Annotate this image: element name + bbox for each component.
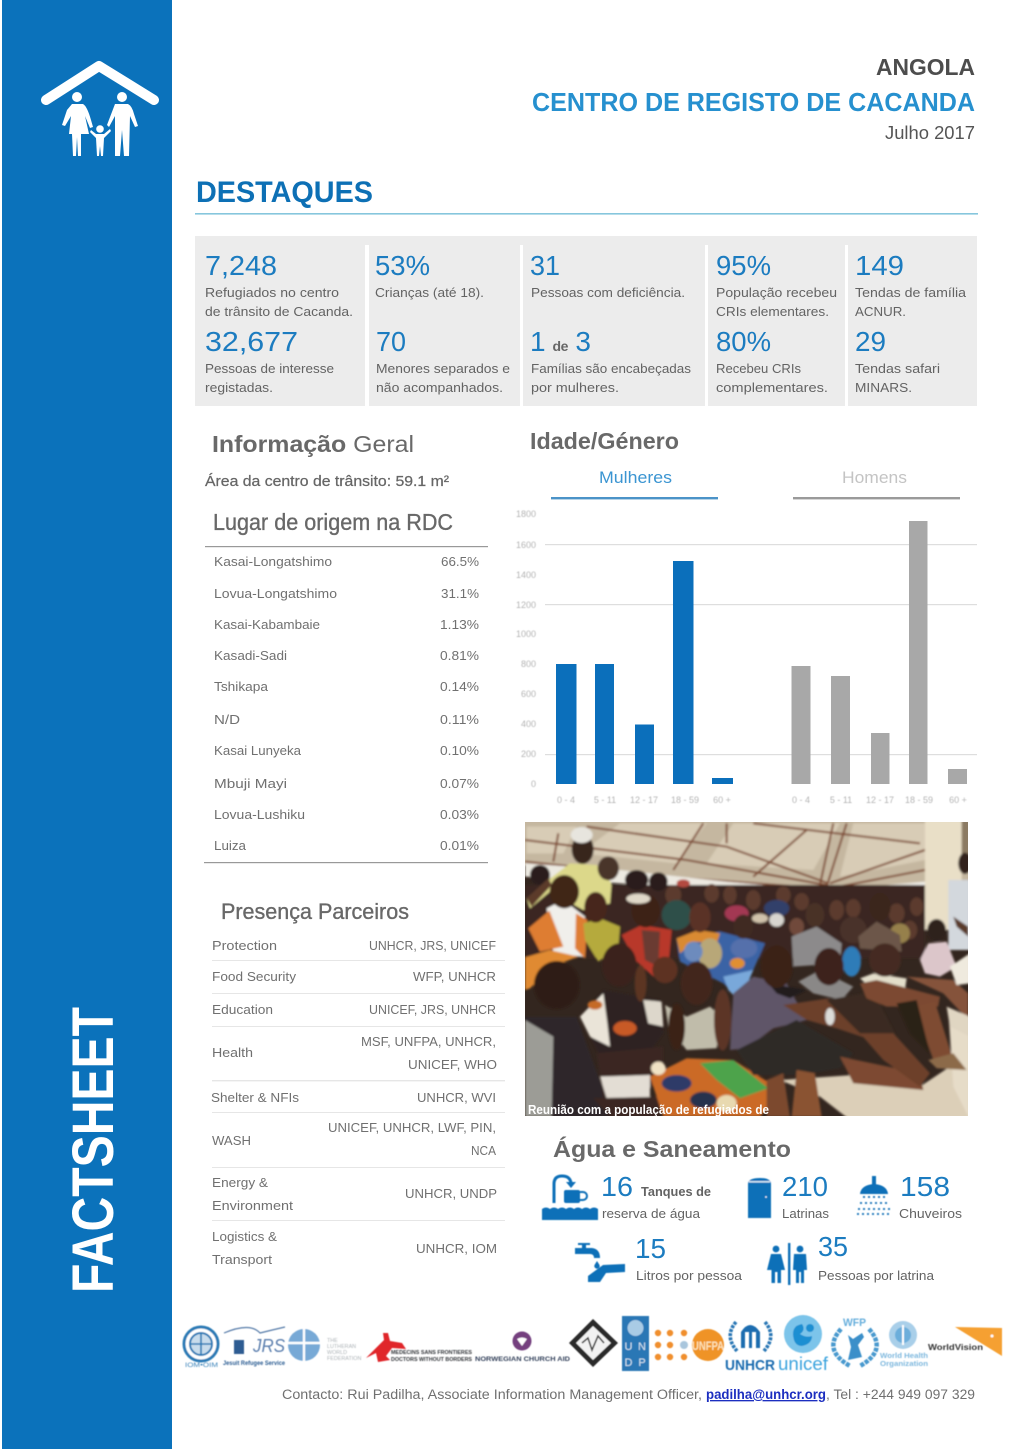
logo: MSF: DOCTORS WITHOUT BORDERS xyxy=(391,1357,472,1363)
figure: family tents: Tendas de família xyxy=(855,285,967,300)
heading: idade/genero: Idade/Género xyxy=(530,428,679,454)
figure: separated minors xyxy=(376,326,510,395)
photo caption: Reunião com a população de refugiados de xyxy=(528,1102,769,1117)
table: place of origin: Kasai-Kabambaie xyxy=(214,617,320,632)
table: place of origin: 0.03% xyxy=(440,807,479,822)
country: ANGOLA xyxy=(876,54,975,80)
crowd background xyxy=(525,885,925,958)
heading: presenca parceiros: Presença Parceiros xyxy=(221,899,409,924)
contact line xyxy=(282,1387,975,1402)
logo: JRS: JRS xyxy=(252,1336,285,1356)
table: partner presence: Education xyxy=(212,1002,273,1017)
table: partner presence: UNICEF, WHO xyxy=(408,1057,497,1072)
stat: tanks xyxy=(601,1171,711,1221)
figure: basic CRIs: 95% xyxy=(716,250,771,281)
women bars xyxy=(556,561,733,784)
logo: WFP: WFP xyxy=(843,1317,866,1329)
table: place of origin: 0.14% xyxy=(440,679,479,694)
figure: persons of interest xyxy=(205,326,334,395)
figure: basic CRIs: CRIs elementares. xyxy=(716,304,829,319)
table: place of origin: N/D xyxy=(214,712,240,727)
icon: people per latrine xyxy=(767,1243,807,1285)
y axis labels xyxy=(516,509,536,789)
table: place of origin: 0.07% xyxy=(440,776,479,791)
men bars xyxy=(792,521,967,784)
figure: female-headed households: por mulheres. xyxy=(531,380,619,395)
icon: family under roof xyxy=(46,66,154,156)
logo: World Vision xyxy=(928,1327,1002,1356)
text: area: Área da centro de trânsito: 59.1 m² xyxy=(205,473,449,490)
table: partner presence: Food Security xyxy=(212,969,297,984)
x axis labels: 18 - 59 xyxy=(905,795,933,805)
right seated man xyxy=(798,970,853,1000)
table: partner presence: UNHCR, WVI xyxy=(417,1090,496,1105)
far right man xyxy=(860,973,907,992)
table: partner presence: UNICEF, JRS, UNHCR xyxy=(369,1002,496,1017)
y axis labels: 1200 xyxy=(516,600,536,610)
table: partner presence: WASH xyxy=(212,1133,251,1148)
table: partner presence: UNHCR, UNDP xyxy=(405,1186,497,1201)
child in yellow xyxy=(583,918,620,962)
table: partner presence: Health xyxy=(212,1045,253,1060)
table: place of origin: 0.11% xyxy=(440,712,479,727)
y axis labels: 600 xyxy=(521,689,536,699)
icon: latrine xyxy=(748,1178,771,1218)
x axis labels: 0 - 4 xyxy=(792,795,810,805)
x axis labels: 18 - 59 xyxy=(671,795,699,805)
smiling woman xyxy=(665,1005,722,1050)
y axis labels: 800 xyxy=(521,659,536,669)
table: partner presence: Transport xyxy=(212,1252,272,1267)
stat: people per latrine: 35 xyxy=(818,1231,848,1262)
seated man pink shirt xyxy=(920,942,957,977)
figure: complementary CRIs xyxy=(716,326,828,395)
table: partner presence: NCA xyxy=(471,1143,496,1158)
pillar xyxy=(925,820,962,930)
stat: showers: Chuveiros xyxy=(899,1206,963,1221)
legend: women: Mulheres xyxy=(599,468,672,487)
photo: meeting with refugees xyxy=(520,820,972,1120)
figure: children: Crianças (até 18). xyxy=(375,285,484,300)
second woman xyxy=(584,992,664,1052)
standing woman xyxy=(527,863,612,910)
y axis labels: 400 xyxy=(521,719,536,729)
figure: family tents: 149 xyxy=(855,250,904,281)
logo: UNFPA xyxy=(655,1329,724,1361)
logo: MSF: MEDECINS SANS FRONTIERES xyxy=(391,1350,472,1356)
logo: UNHCR: UNHCR xyxy=(725,1357,775,1374)
figure: disability: 31 xyxy=(530,250,560,281)
figure: refugees: Refugiados no centro xyxy=(205,285,339,300)
logo: WHO: World Health xyxy=(880,1353,928,1360)
logo: World Vision: WorldVision xyxy=(928,1343,983,1352)
skirt xyxy=(650,1058,783,1117)
figure: complementary CRIs: 80% xyxy=(716,326,771,357)
logo: MSF xyxy=(366,1333,472,1363)
standing man right xyxy=(948,880,970,950)
figure: safari tents: 29 xyxy=(855,326,886,357)
figure: refugees: de trânsito de Cacanda. xyxy=(205,304,353,319)
figure: separated minors: Menores separados e xyxy=(376,361,510,376)
table: partner presence: UNHCR, JRS, UNICEF xyxy=(369,938,496,953)
stat: showers xyxy=(899,1171,963,1221)
figure: persons of interest: 32,677 xyxy=(205,326,298,357)
contact line: Contacto: Rui Padilha, Associate Information Management Officer, xyxy=(282,1387,702,1402)
logo: WHO: Organization xyxy=(880,1361,928,1368)
table: partner presence: UNICEF, UNHCR, LWF, PIN, xyxy=(328,1120,496,1135)
logo: WHO xyxy=(880,1321,928,1368)
figure: basic CRIs: População recebeu xyxy=(716,285,837,300)
logo: UNICEF: unicef xyxy=(778,1354,829,1374)
logo: Norwegian Church Aid xyxy=(475,1332,571,1363)
orange scarf woman xyxy=(525,950,578,990)
x axis labels xyxy=(557,795,967,805)
y axis labels: 1400 xyxy=(516,570,536,580)
blue dress women xyxy=(676,930,766,988)
table: place of origin: Kasadi-Sadi xyxy=(214,648,287,663)
logo: UNDP: N xyxy=(638,1341,646,1353)
table: place of origin: 0.81% xyxy=(440,648,479,663)
table: partner presence: Environment xyxy=(212,1198,293,1213)
table: place of origin: 1.13% xyxy=(440,617,479,632)
stat: people per latrine: Pessoas por latrina xyxy=(818,1268,935,1283)
table: place of origin: Tshikapa xyxy=(214,679,269,694)
stat: litres: 15 xyxy=(635,1233,666,1264)
logo: UNHCR xyxy=(725,1322,775,1374)
back men xyxy=(792,927,842,967)
logo: UNDP: U xyxy=(625,1341,633,1353)
table: partner presence: Protection xyxy=(212,938,277,953)
figure: disability: Pessoas com deficiência. xyxy=(531,285,685,300)
table: place of origin: Lovua-Lushiku xyxy=(214,807,305,822)
logo: Norwegian Church Aid: NORWEGIAN CHURCH AID xyxy=(475,1357,571,1363)
stat: showers: 158 xyxy=(900,1171,950,1202)
stat: litres: Litros por pessoa xyxy=(636,1268,743,1283)
stat: tanks: reserva de água xyxy=(602,1206,701,1221)
table: place of origin: Kasai-Longatshimo xyxy=(214,554,332,569)
figure: children: 53% xyxy=(375,250,430,281)
figure: refugees: 7,248 xyxy=(205,250,277,281)
stat: tanks: Tanques de xyxy=(641,1184,711,1199)
heading: destaques: DESTAQUES xyxy=(196,176,373,209)
partner logos xyxy=(184,1315,1002,1374)
logo: UNICEF xyxy=(778,1315,829,1374)
x axis labels: 5 - 11 xyxy=(594,795,616,805)
table: partner presence: Shelter & NFIs xyxy=(211,1090,300,1105)
table: place of origin: 0.10% xyxy=(440,743,479,758)
figure: complementary CRIs: Recebeu CRIs xyxy=(716,361,801,376)
figure: safari tents: Tendas safari xyxy=(855,361,940,376)
logo: Lutheran World Federation xyxy=(287,1328,361,1362)
table: partner presence: WFP, UNHCR xyxy=(413,969,496,984)
figure: safari tents: MINARS. xyxy=(855,380,912,395)
figure: female-headed households: Famílias são encabeçadas xyxy=(531,361,692,376)
figure: family tents: ACNUR. xyxy=(855,304,906,319)
logo: Lutheran World Federation: WORLD xyxy=(327,1350,347,1356)
table: partner presence xyxy=(211,899,505,1267)
stat: latrines: Latrinas xyxy=(782,1206,830,1221)
email link: padilha@unhcr.org xyxy=(706,1387,826,1402)
logo: UNDP xyxy=(622,1316,649,1371)
icon: water tank xyxy=(542,1176,598,1220)
sidebar label: FACTSHEET: FACTSHEET xyxy=(61,1007,126,1293)
x axis labels: 12 - 17 xyxy=(630,795,658,805)
bar chart: age and gender xyxy=(516,428,977,805)
figure: persons of interest: registadas. xyxy=(205,380,273,395)
x axis labels: 5 - 11 xyxy=(830,795,852,805)
icon: shower xyxy=(857,1176,891,1214)
x axis labels: 0 - 4 xyxy=(557,795,575,805)
table: partner presence: MSF, UNFPA, UNHCR, xyxy=(361,1034,496,1049)
section: water and sanitation xyxy=(542,1135,963,1285)
figure: female-headed households: 1 de 3 xyxy=(530,326,591,357)
centre name: CENTRO DE REGISTO DE CACANDA xyxy=(532,87,975,117)
logo: Lutheran World Federation: FEDERATION xyxy=(327,1356,361,1362)
logo: UNFPA: UNFPA xyxy=(692,1339,724,1353)
red jacket woman xyxy=(622,925,672,977)
stat: latrines: 210 xyxy=(782,1171,828,1202)
sidebar xyxy=(2,0,172,1449)
table: place of origin: 66.5% xyxy=(441,554,479,569)
table: place of origin: Luiza xyxy=(214,838,247,853)
figure: complementary CRIs: complementares. xyxy=(716,380,828,395)
floor xyxy=(782,1067,968,1116)
y axis labels: 0 xyxy=(531,779,536,789)
heading: lugar de origem: Lugar de origem na RDC xyxy=(213,509,453,535)
x axis labels: 12 - 17 xyxy=(866,795,894,805)
table: place of origin: Kasai Lunyeka xyxy=(214,743,302,758)
y axis labels: 1800 xyxy=(516,509,536,519)
figure: children xyxy=(375,250,484,300)
table: partner presence: UNHCR, IOM xyxy=(416,1241,497,1256)
logo: UNDP: D xyxy=(625,1357,633,1369)
figure: safari tents xyxy=(855,326,940,395)
date: Julho 2017 xyxy=(885,123,975,143)
y axis labels: 1000 xyxy=(516,629,536,639)
table: place of origin: 31.1% xyxy=(441,586,479,601)
figure: separated minors: não acompanhados. xyxy=(376,380,503,395)
stat: latrines xyxy=(782,1171,830,1221)
centre man xyxy=(730,977,807,1050)
logo: JRS xyxy=(223,1327,286,1367)
figure: persons of interest: Pessoas de interesse xyxy=(205,361,334,376)
logo: WFP xyxy=(833,1317,877,1366)
figure: disability xyxy=(530,250,685,300)
logo: Lutheran World Federation: THE xyxy=(327,1338,338,1344)
heading: informacao geral: Informação Geral xyxy=(212,431,414,457)
logo: Lutheran World Federation: LUTHERAN xyxy=(327,1344,356,1350)
stat: litres xyxy=(635,1233,743,1283)
x axis labels: 60 + xyxy=(713,795,731,805)
panel: key figures xyxy=(195,236,977,406)
stat: people per latrine xyxy=(818,1231,935,1283)
table: partner presence: Logistics & xyxy=(212,1229,277,1244)
table: place of origin: Mbuji Mayi xyxy=(214,776,287,791)
legend: men: Homens xyxy=(842,468,907,487)
table: place of origin: Lovua-Longatshimo xyxy=(214,586,337,601)
logo: IOM: IOM•OIM xyxy=(185,1362,218,1369)
contact line: , Tel : +244 949 097 329 xyxy=(826,1387,975,1402)
y axis labels: 200 xyxy=(521,749,536,759)
x axis labels: 60 + xyxy=(949,795,967,805)
figure: family tents xyxy=(855,250,967,319)
table: place of origin xyxy=(204,509,488,863)
stat: tanks: 16 xyxy=(601,1171,633,1202)
logo: UNDP: P xyxy=(638,1357,646,1369)
sky strip xyxy=(525,862,926,888)
roof xyxy=(525,822,968,887)
y axis labels: 1600 xyxy=(516,540,536,550)
logo: JRS: Jesuit Refugee Service xyxy=(223,1361,286,1367)
table: partner presence: Energy & xyxy=(212,1175,268,1190)
figure: female-headed households xyxy=(530,326,692,395)
figure: refugees xyxy=(205,250,353,319)
heading: agua e saneamento: Água e Saneamento xyxy=(553,1135,791,1162)
figure: separated minors: 70 xyxy=(376,326,406,357)
orange vest person xyxy=(547,900,585,957)
logo: IOM xyxy=(184,1327,218,1369)
logo: diamond emblem xyxy=(569,1319,618,1367)
table: place of origin: 0.01% xyxy=(440,838,479,853)
icon: tap and hand xyxy=(575,1243,625,1282)
header xyxy=(532,54,975,143)
figure: basic CRIs xyxy=(716,250,837,319)
